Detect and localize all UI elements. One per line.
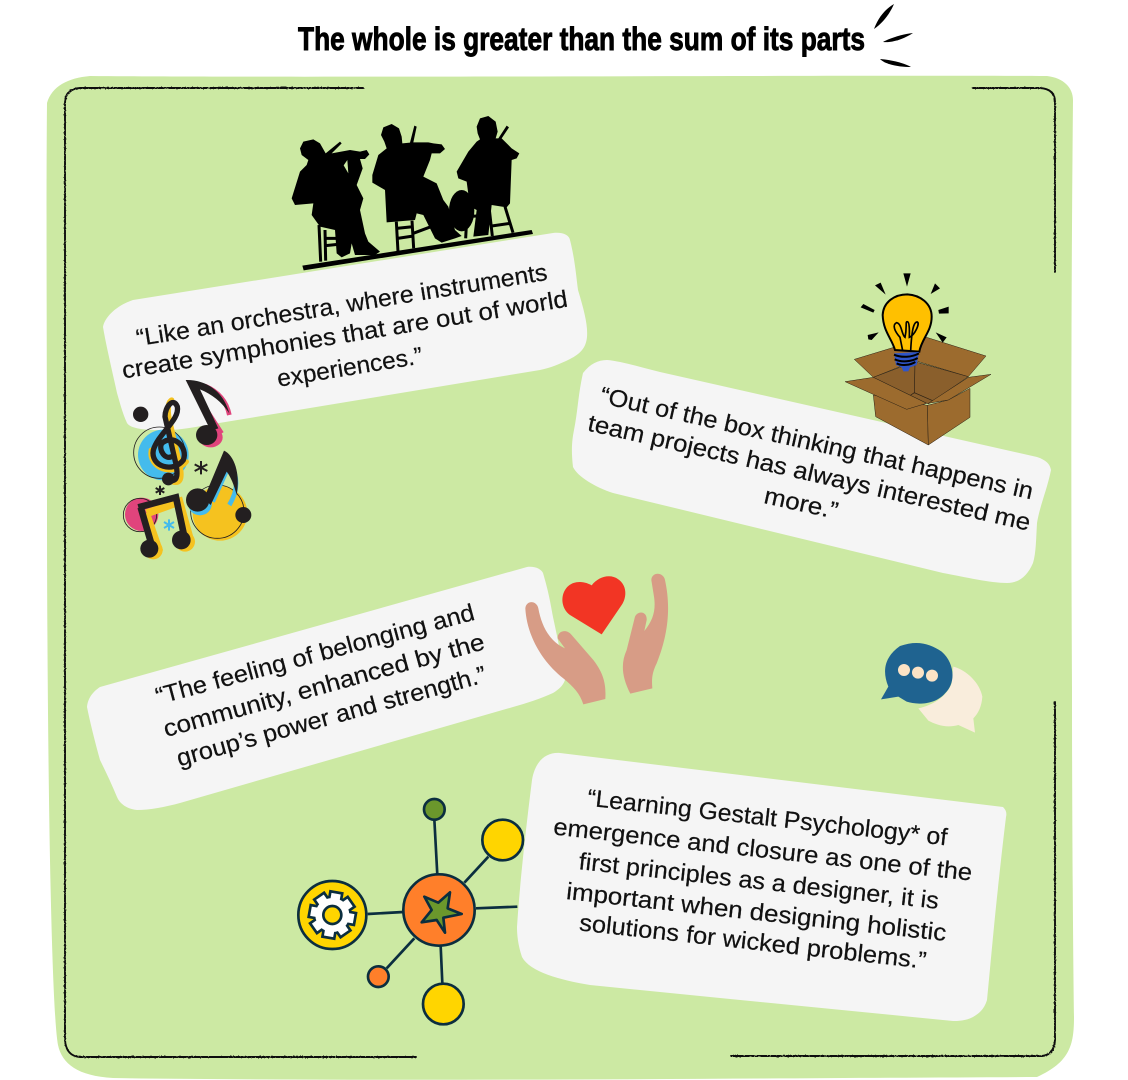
title: The whole is greater than the sum of its parts (298, 21, 865, 57)
quote text: belonging: “The feeling of belonging and (153, 599, 477, 710)
panel: box quote (572, 360, 1051, 583)
box back flaps and inside (854, 337, 986, 404)
speech bubble: orchestra (103, 233, 587, 430)
note: single blue (186, 451, 238, 515)
stage line (302, 230, 533, 270)
speech bubble: belonging (87, 567, 565, 810)
panel: belonging quote (87, 567, 565, 810)
box front (845, 374, 991, 445)
icon: gear (309, 891, 356, 939)
quote text: belonging: group’s power and strength.” (174, 661, 489, 772)
icon: network diagram (298, 799, 523, 1024)
quote text: gestalt: “Learning Gestalt Psychology* of (586, 785, 949, 851)
quote text: out of the box: “Out of the box thinking that happens in (598, 382, 1036, 505)
icon: light bulb in box (845, 273, 991, 445)
sketched frame (65, 88, 1055, 1057)
icon: chat bubbles (881, 643, 982, 733)
quote text: belonging: community, enhanced by the (160, 629, 488, 743)
icon: music notes (123, 380, 251, 559)
quote text: belonging (153, 599, 489, 772)
player two (372, 124, 462, 252)
quote text: gestalt: important when designing holistic (565, 878, 948, 947)
icon: hands holding heart (525, 574, 668, 704)
quote text: orchestra: experiences.” (275, 343, 425, 393)
speech bubble: gestalt (517, 753, 1006, 1021)
icon: orchestra silhouette (292, 116, 533, 270)
quote text: out of the box: more.” (762, 482, 841, 525)
accents: asterisks (156, 461, 207, 531)
quote text: orchestra: create symphonies that are out of world (120, 286, 570, 384)
note: beamed pair (138, 497, 195, 559)
quote text: orchestra (120, 259, 570, 393)
quote text: out of the box: team projects has always interested me (585, 410, 1033, 537)
quote text: gestalt: emergence and closure as one of the (552, 814, 974, 887)
quote text: orchestra: “Like an orchestra, where instruments (134, 259, 549, 352)
note: single pink (186, 380, 229, 447)
quote text: gestalt: first principles as a designer, it is (577, 848, 940, 915)
speech bubble: out of the box (572, 360, 1051, 583)
player one (292, 139, 380, 262)
note: treble clef (151, 400, 187, 485)
quote text: gestalt: solutions for wicked problems.” (578, 909, 928, 975)
player three (449, 116, 519, 238)
quote text: gestalt (552, 785, 974, 975)
panel: orchestra quote (103, 233, 587, 430)
panel: gestalt quote (517, 753, 1006, 1021)
icon: emphasis sparks (874, 4, 913, 67)
bulb (861, 273, 949, 371)
